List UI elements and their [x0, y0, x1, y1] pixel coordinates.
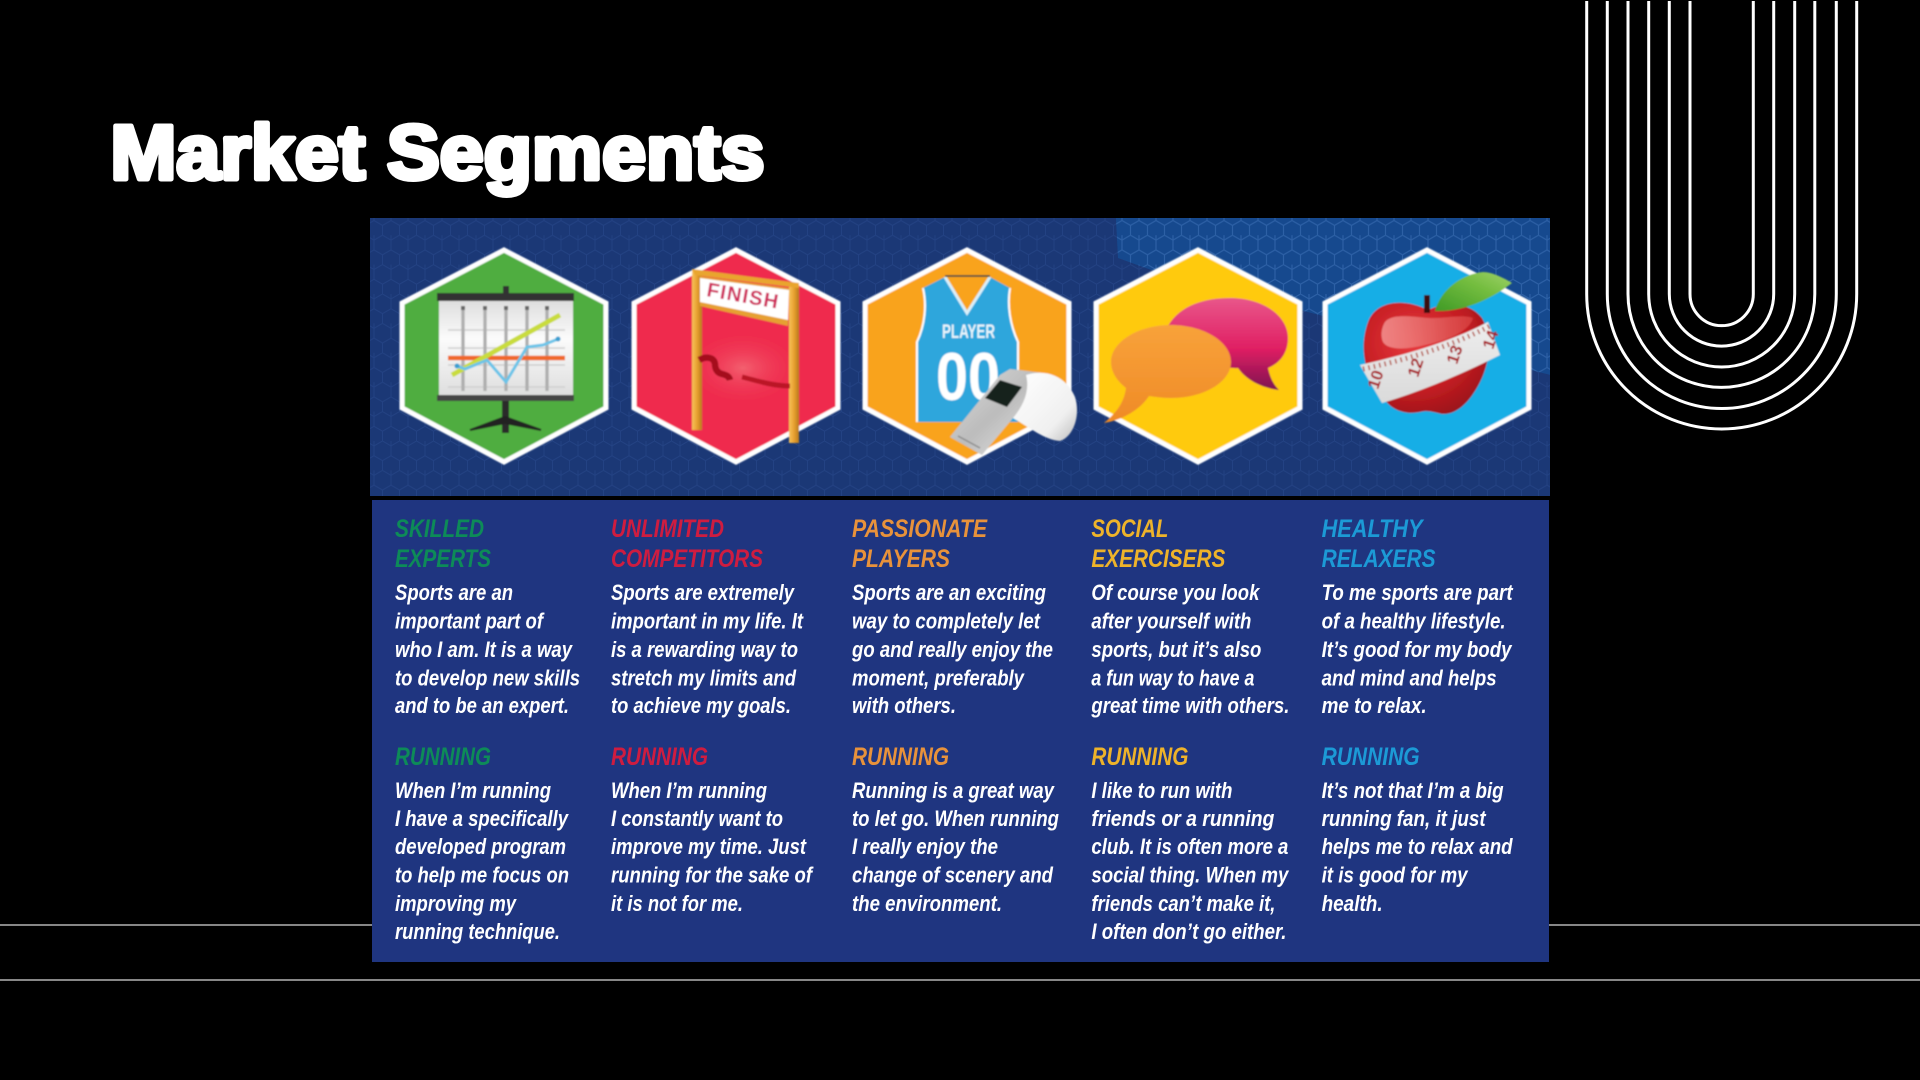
column: healthy relaxers [1322, 515, 1514, 916]
icon: apple and tape measure hexagon: 10 [1365, 368, 1387, 391]
column: skilled experts [395, 515, 580, 944]
subheading: running: RUNNING [611, 743, 708, 771]
decorative U-shaped concentric lines [1587, 1, 1857, 429]
heading [852, 515, 988, 573]
text block: sports [395, 580, 580, 718]
text block: sports: Sports are extremely [611, 580, 795, 605]
heading: COMPETITORS [611, 545, 763, 573]
icon: player jersey and whistle hexagon: PLAYER [942, 322, 995, 343]
heading [611, 515, 763, 573]
text block: running: it is not for me. [611, 891, 743, 916]
text block: sports: go and really enjoy the [851, 637, 1053, 662]
subheading: running: RUNNING [1091, 743, 1188, 771]
text block: sports: Sports are an [395, 580, 513, 605]
panel: segment descriptions [372, 500, 1549, 962]
icon: apple and tape measure hexagon: 13 [1444, 343, 1466, 366]
text block: running [1322, 778, 1514, 916]
text block: sports [611, 580, 804, 718]
heading: EXERCISERS [1091, 545, 1226, 573]
title: Market Segments [110, 110, 764, 196]
text block: running: it is good for my [1322, 862, 1469, 888]
text block: sports: with others. [852, 693, 956, 718]
text block: sports: To me sports are part [1322, 580, 1514, 605]
text block: sports: stretch my limits and [611, 666, 797, 690]
text block: running [611, 778, 814, 916]
column: unlimited competitors [611, 515, 814, 916]
heading: SOCIAL [1091, 515, 1168, 543]
text block: sports: great time with others. [1091, 693, 1289, 718]
icon: apple and tape measure hexagon: 14 [1480, 327, 1503, 351]
text block: running [852, 778, 1059, 916]
text block: sports: It’s good for my body [1322, 637, 1513, 662]
text block: running: It’s not that I’m a big [1322, 778, 1504, 803]
text block: sports: after yourself with [1091, 608, 1251, 634]
text block: running: to let go. When running [852, 806, 1059, 831]
subheading: running: RUNNING [395, 743, 491, 771]
heading: PLAYERS [852, 545, 950, 573]
text block: running: running fan, it just [1322, 806, 1487, 831]
text block: running [395, 778, 569, 944]
icon: presentation chart hexagon [402, 250, 606, 462]
text block: running: friends can’t make it, [1091, 891, 1275, 916]
text block: sports: important part of [395, 608, 545, 634]
text block: sports [1322, 580, 1514, 718]
text block: running [1091, 778, 1290, 944]
heading: SKILLED [395, 515, 484, 543]
text block: sports [851, 580, 1053, 718]
text block: sports: who I am. It is a way [395, 637, 573, 662]
column: social exercisers [1091, 515, 1290, 944]
panel: icon banner [370, 200, 1570, 496]
text block: running: running for the sake of [611, 862, 814, 888]
text block: sports: sports, but it’s also [1091, 637, 1262, 662]
heading [1091, 515, 1226, 573]
text block: running: change of scenery and [852, 862, 1054, 888]
text block: sports: Sports are an exciting [852, 580, 1046, 605]
text block: running: improving my [395, 891, 517, 916]
icon: player jersey and whistle hexagon [865, 250, 1077, 462]
text block: sports [1091, 580, 1289, 718]
text block: sports: me to relax. [1322, 693, 1427, 718]
text block: sports: is a rewarding way to [611, 637, 798, 662]
subheading: running: RUNNING [852, 743, 949, 771]
text block: running: improve my time. Just [611, 834, 807, 859]
text block: sports: and mind and helps [1322, 666, 1497, 690]
text block: sports: of a healthy lifestyle. [1322, 608, 1506, 634]
heading [1322, 515, 1436, 573]
text block: running: running technique. [395, 919, 560, 944]
heading [395, 515, 491, 573]
text block: running: I have a specifically [395, 806, 569, 831]
icon: finish line hexagon [634, 250, 838, 462]
icon: finish line hexagon: FINISH [705, 279, 780, 313]
heading: HEALTHY [1322, 515, 1425, 543]
heading: EXPERTS [395, 545, 491, 573]
text block: running: friends or a running [1091, 806, 1275, 831]
subheading: running: RUNNING [1322, 743, 1420, 771]
text block: sports: important in my life. It [611, 608, 804, 634]
icon: apple and tape measure hexagon: 12 [1405, 356, 1427, 379]
icon: player jersey and whistle hexagon: 00 [936, 339, 1000, 415]
column: passionate players [851, 515, 1059, 916]
text block: running: When I’m running [611, 778, 767, 803]
text block: running: club. It is often more a [1091, 834, 1288, 859]
text block: running: social thing. When my [1091, 862, 1290, 888]
text block: running: to help me focus on [395, 862, 569, 888]
text block: sports: to achieve my goals. [611, 693, 791, 718]
heading: RELAXERS [1322, 545, 1436, 573]
horizontal rule lower [0, 979, 1920, 981]
text block: running: When I’m running [395, 778, 551, 803]
horizontal rule upper [0, 924, 1920, 926]
icon: apple and tape measure hexagon [1325, 250, 1529, 462]
heading: UNLIMITED [611, 515, 724, 543]
text block: running: health. [1322, 891, 1383, 916]
text block: sports: and to be an expert. [395, 693, 569, 718]
text block: running: the environment. [852, 891, 1002, 916]
text block: sports: way to completely let [852, 608, 1041, 634]
text block: running: helps me to relax and [1322, 834, 1514, 859]
text block: running: I constantly want to [611, 806, 783, 831]
text block: sports: a fun way to have a [1091, 666, 1254, 690]
text block: sports: Of course you look [1091, 580, 1261, 605]
text block: running: I often don’t go either. [1091, 919, 1286, 944]
heading: PASSIONATE [852, 515, 988, 543]
icon: speech bubbles hexagon [1096, 250, 1300, 462]
text block: running: I really enjoy the [852, 834, 998, 859]
text block: running: I like to run with [1091, 778, 1232, 803]
text block: running: Running is a great way [852, 778, 1055, 803]
text block: sports: moment, preferably [852, 666, 1025, 690]
text block: running: developed program [395, 834, 566, 859]
text block: sports: to develop new skills [395, 666, 580, 690]
